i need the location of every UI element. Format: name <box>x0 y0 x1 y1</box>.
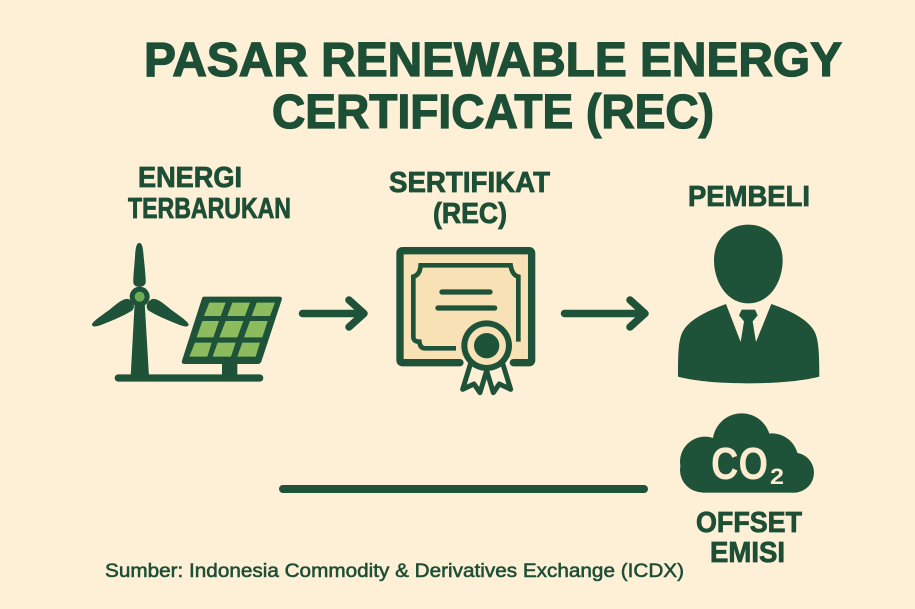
solar panel frame <box>182 297 282 364</box>
solar panel stand <box>222 360 237 377</box>
title <box>144 34 842 139</box>
title: CERTIFICATE (REC) <box>272 86 714 139</box>
source note: Sumber: Indonesia Commodity & Derivatives Exchange (ICDX) <box>105 560 684 582</box>
shoulders and torso <box>678 304 819 383</box>
title: PASAR RENEWABLE ENERGY <box>144 34 842 87</box>
icon: CO2 cloud: CO <box>711 438 768 489</box>
label: sertifikat <box>389 167 550 230</box>
label: offset emisi: OFFSET <box>696 507 802 539</box>
outer frame <box>400 251 532 363</box>
turbine blades <box>92 243 189 326</box>
icon: CO2 cloud: 2 <box>770 464 784 489</box>
text lines <box>435 289 497 311</box>
icon: buyer in suit <box>678 225 819 383</box>
label: sertifikat: SERTIFIKAT <box>389 167 550 199</box>
label: offset emisi <box>696 507 802 569</box>
head <box>714 225 783 303</box>
solar cells <box>189 303 275 357</box>
turbine hub <box>130 287 150 307</box>
icon: CO2 cloud <box>680 413 814 493</box>
cloud shape <box>680 413 814 493</box>
arrow: energy to certificate <box>302 300 364 327</box>
label: sertifikat: (REC) <box>433 198 507 230</box>
label: offset emisi: EMISI <box>710 537 785 569</box>
icon: certificate with seal <box>400 251 532 393</box>
label: energi terbarukan <box>128 162 291 225</box>
seal <box>461 320 512 371</box>
label: energi terbarukan: TERBARUKAN <box>128 193 291 225</box>
arrow: certificate to buyer <box>564 300 645 327</box>
ground line <box>115 374 263 382</box>
label: energi terbarukan: ENERGI <box>138 162 242 194</box>
inner ornamental border <box>413 265 518 348</box>
turbine tower <box>131 297 149 377</box>
label: pembeli: PEMBELI <box>688 181 810 213</box>
ribbon tails <box>463 363 511 393</box>
tie <box>739 310 758 342</box>
icon: wind turbine and solar panel <box>92 243 282 382</box>
connector line <box>279 485 648 493</box>
certificate paper <box>400 251 532 363</box>
